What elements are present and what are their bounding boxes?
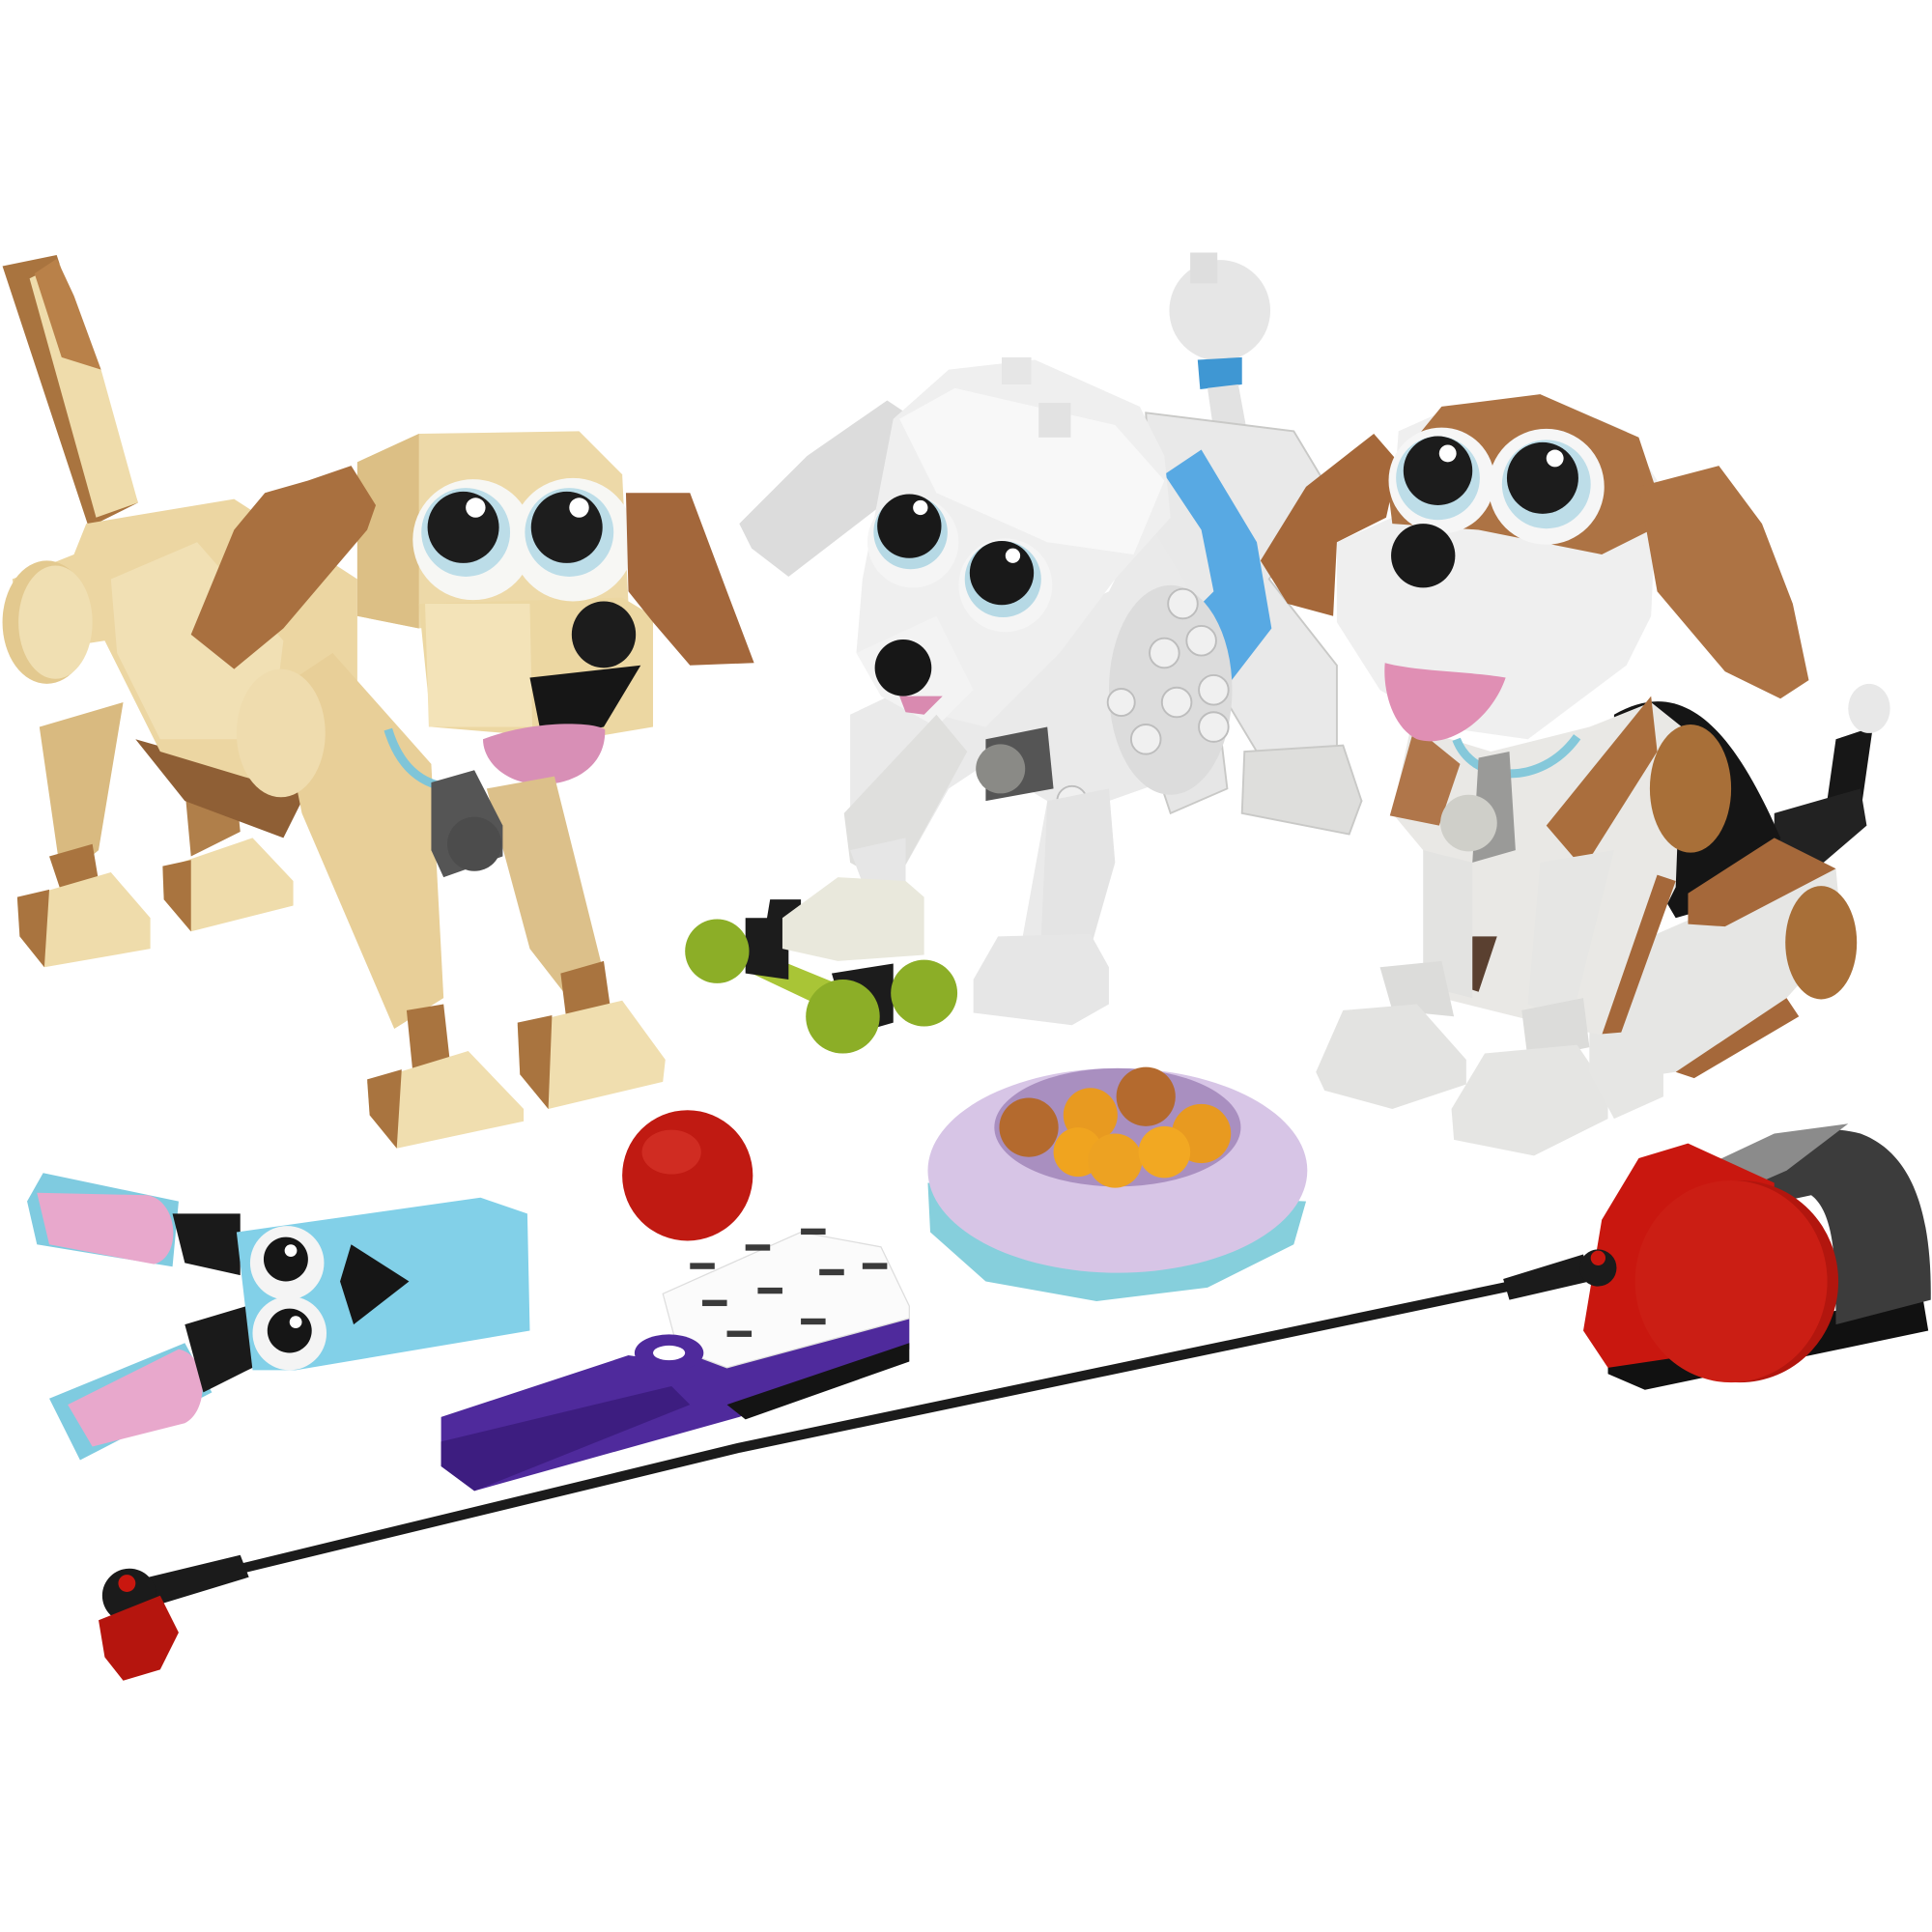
pom tail	[1169, 252, 1270, 431]
black arms	[173, 1213, 252, 1392]
ears	[1261, 434, 1808, 698]
poodle nose and tongue	[875, 639, 943, 715]
toy eyes	[250, 1226, 327, 1370]
tongue	[483, 724, 605, 784]
tan dog	[3, 255, 754, 1149]
leash reel	[1583, 1123, 1931, 1390]
paws	[1316, 1005, 1663, 1155]
black back	[1614, 701, 1780, 918]
tail	[3, 255, 138, 527]
beagle tongue	[1384, 663, 1506, 741]
poodle eyes	[867, 494, 1052, 632]
bone toy	[685, 899, 957, 1054]
haunch	[1589, 838, 1857, 1084]
blue body	[237, 1198, 529, 1370]
blue jumper	[1164, 450, 1271, 688]
body	[3, 499, 357, 788]
head	[1337, 394, 1658, 739]
white poodle	[739, 252, 1361, 1025]
head	[856, 357, 1171, 727]
left ear	[739, 401, 924, 577]
poodle tag	[976, 727, 1054, 801]
tail	[1775, 684, 1890, 863]
eyes	[412, 478, 635, 601]
front legs and paws	[782, 715, 1115, 1025]
nose	[572, 601, 636, 668]
right ear	[626, 493, 754, 666]
chest and front body	[1390, 696, 1731, 1035]
front body	[850, 518, 1233, 985]
chew toy with eyes	[27, 1173, 529, 1460]
grooming brush	[441, 1229, 909, 1491]
collar and tag	[1440, 737, 1577, 863]
front legs	[237, 653, 610, 1072]
front paws	[367, 1001, 666, 1149]
front legs	[1380, 850, 1614, 1060]
far legs	[17, 702, 308, 967]
leash cord	[124, 1249, 1616, 1608]
left ear	[191, 466, 376, 669]
beagle eyes	[1389, 428, 1605, 545]
head	[357, 431, 653, 739]
kibble	[999, 1067, 1231, 1188]
beagle dog	[1261, 394, 1890, 1155]
leash handle	[99, 1569, 179, 1681]
beagle nose	[1391, 524, 1455, 587]
hind body and legs	[1146, 412, 1361, 835]
toy nose	[340, 1244, 409, 1324]
red ball	[622, 1110, 753, 1240]
food bowl	[927, 1067, 1307, 1301]
collar and tag	[388, 729, 502, 877]
pink ends	[27, 1173, 212, 1460]
